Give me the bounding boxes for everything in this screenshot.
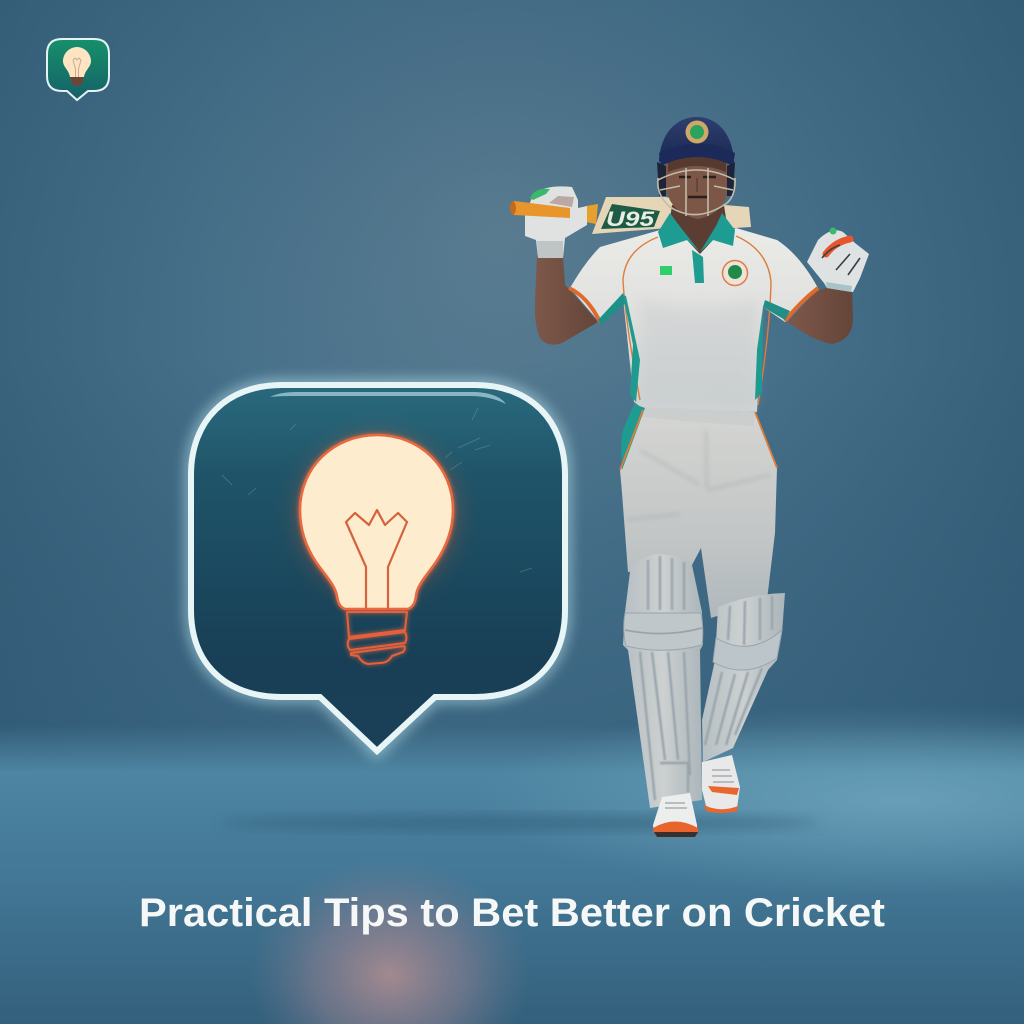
shirt raglan piping: [623, 236, 771, 405]
left glove: [510, 186, 587, 258]
chest badge: [722, 260, 748, 286]
callout: glowing speech bubble: [191, 385, 565, 751]
face: [666, 155, 728, 219]
bulb glass: [300, 435, 453, 609]
bat sticker: U95: [606, 208, 654, 231]
bubble body: [191, 385, 565, 751]
sleeve cuffs: [569, 288, 818, 322]
bulb glow: [297, 435, 457, 595]
cricket player: [510, 117, 869, 837]
right shoe: [702, 755, 740, 813]
left leg pad: [623, 554, 703, 808]
bulb filament: [346, 510, 407, 609]
logo bulb base: [70, 77, 84, 86]
placket: [692, 250, 704, 283]
bat sticker: [601, 204, 660, 231]
helmet brim: [659, 144, 735, 166]
right leg pad: [702, 593, 785, 762]
left pad knee roll: [624, 613, 703, 650]
bulb screw base: [347, 612, 407, 664]
title: Practical Tips to Bet Better on Cricket: [139, 891, 885, 935]
trouser folds: [626, 430, 770, 520]
chest green patch: [660, 266, 672, 275]
trousers: [620, 404, 777, 618]
shirt soft shading: [640, 300, 758, 405]
right arm: [788, 288, 853, 344]
shirt: [569, 213, 818, 412]
bat handle in hand: [511, 201, 570, 218]
helmet badge: [686, 120, 708, 144]
bat handle stub: [586, 204, 598, 224]
left shoe: [653, 793, 698, 837]
bubble gloss highlight: [270, 392, 506, 404]
right glove: [807, 228, 869, 292]
logo bulb glass: [63, 47, 91, 77]
waistband: [642, 407, 755, 426]
logo: speech bubble with light bulb: [47, 39, 109, 100]
bat: [586, 197, 751, 234]
side panels: [598, 293, 790, 325]
neck: [668, 205, 728, 256]
helmet dome: [659, 117, 734, 162]
head and helmet: [657, 117, 735, 219]
left teal waist panel: [621, 404, 645, 470]
left pad ribs: [640, 556, 690, 800]
logo bulb filament: [73, 58, 81, 77]
helmet grille: [658, 168, 735, 216]
collar flaps: [658, 213, 735, 252]
right pad ribs: [705, 596, 772, 745]
right pad knee roll: [713, 630, 782, 670]
piping: [620, 410, 777, 470]
bubble scratches: [222, 408, 532, 572]
left arm: [535, 255, 598, 345]
bat blade: [592, 197, 751, 234]
